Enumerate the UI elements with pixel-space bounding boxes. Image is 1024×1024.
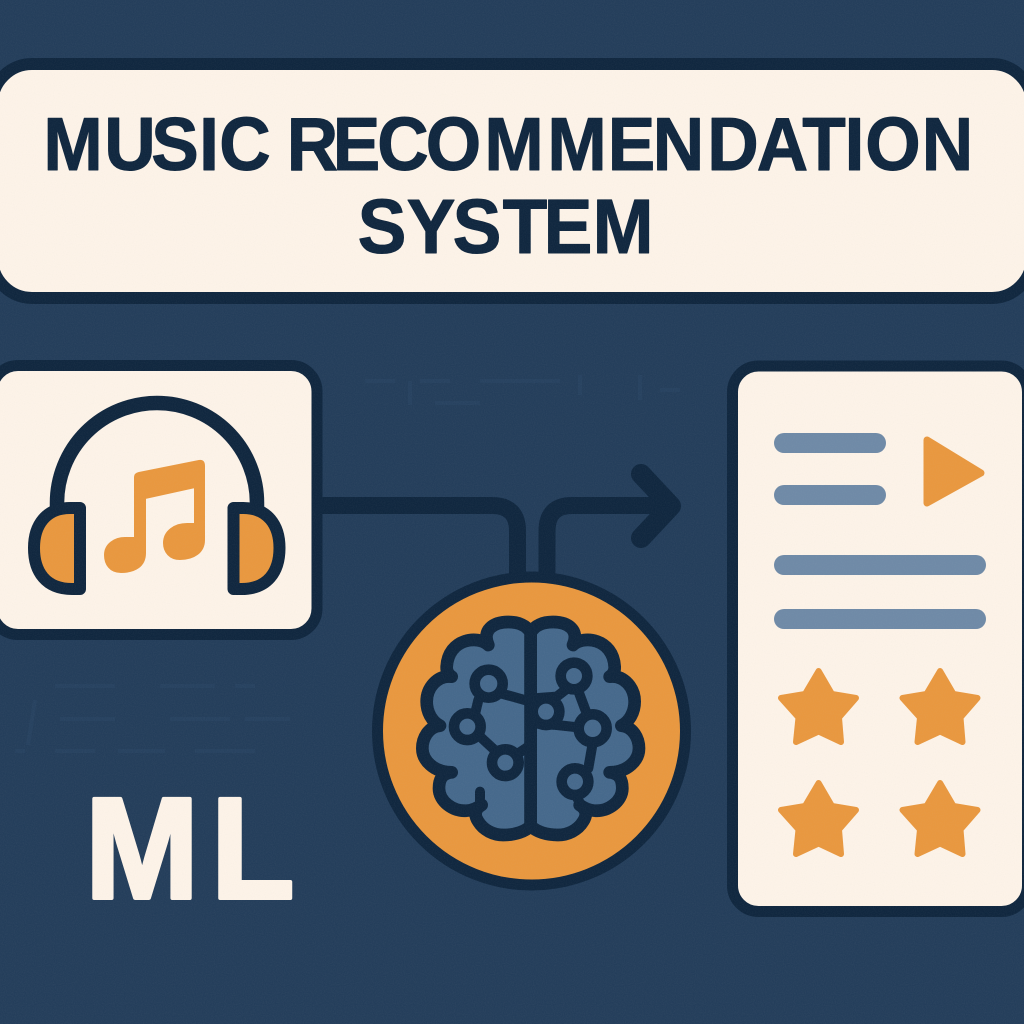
panel: recommendations list (732, 366, 1024, 912)
brain right hemisphere (531, 622, 639, 835)
icon: music note (105, 461, 204, 572)
icon: play button (927, 440, 981, 503)
title heading (43, 103, 973, 269)
ML label: ML (85, 768, 295, 929)
title heading: SYSTEM (358, 183, 654, 269)
neural connections (474, 685, 593, 810)
panel: music input (0, 366, 317, 634)
playlist bar 2 (774, 485, 886, 505)
playlist bar 1 (774, 433, 886, 453)
icon: headphones (34, 403, 280, 589)
arrow: connector from headphones through brain to playlist (318, 474, 671, 585)
playlist bar 3 (774, 555, 986, 575)
title panel (0, 64, 1024, 298)
network nodes (454, 663, 607, 795)
icon: machine learning brain (378, 577, 686, 885)
playlist bar 4 (774, 609, 986, 629)
brain left hemisphere (422, 622, 531, 835)
title heading: MUSIC RECOMMENDATION (43, 103, 973, 186)
icon: rating stars (781, 671, 978, 854)
